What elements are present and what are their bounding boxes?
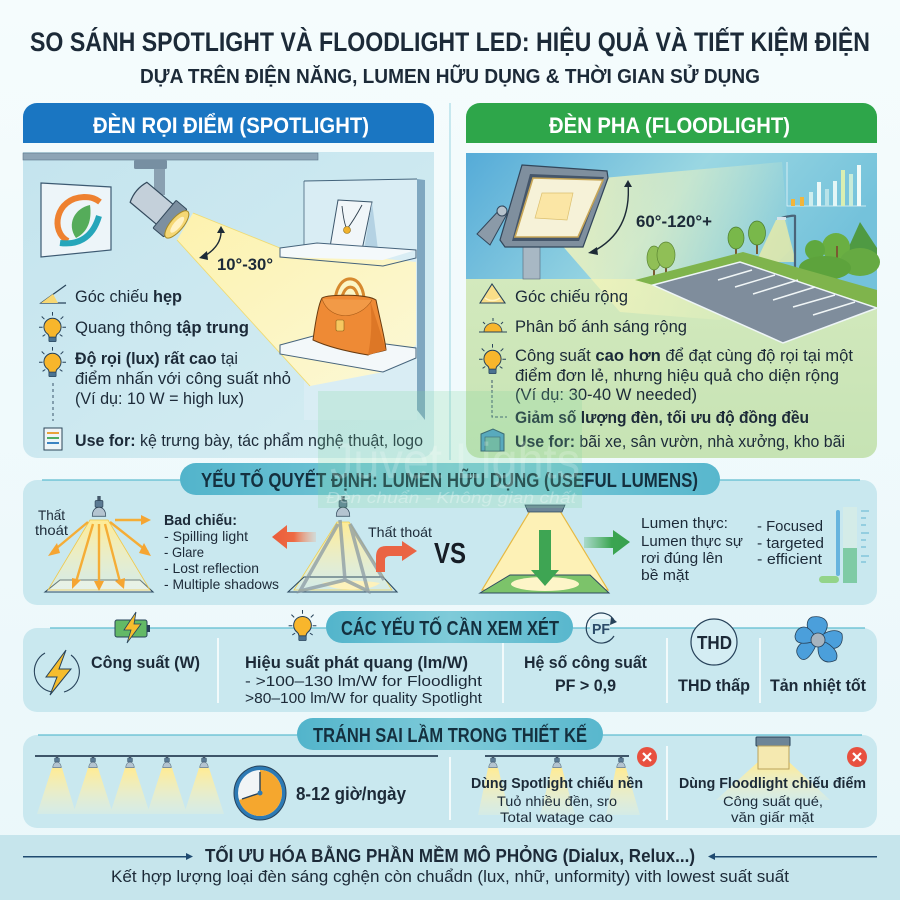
beam angle arrow [588, 180, 632, 255]
icon: bulb lux [39, 347, 66, 377]
wide angle text: Góc chiếu rộng [515, 287, 628, 306]
bad beam list [164, 512, 279, 592]
gauge [819, 507, 869, 583]
THD label: THD thấp [678, 676, 750, 695]
wall display with shelves [304, 179, 425, 420]
spotlight header: ĐÈN RỌI ĐIỂM (SPOTLIGHT) [93, 113, 369, 138]
footer band [0, 835, 900, 900]
watermark: Juvet Lights [330, 433, 580, 489]
higher power text: Công suất cao hơn để đạt cùng độ rọi tại một [515, 346, 853, 365]
lamp with shadows [288, 496, 397, 592]
power factor text: Hệ số công suất [524, 653, 647, 672]
beam angle label: 60°-120°+ [636, 212, 712, 231]
subtitle: DỰA TRÊN ĐIỆN NĂNG, LUMEN HỮU DỤNG & THỜI GIAN SỬ DỤNG [140, 64, 760, 88]
grass text panel background [466, 279, 877, 458]
power label: Công suất (W) [91, 653, 200, 672]
real lumen text: Lumen thực: [641, 515, 728, 532]
trees and bushes [647, 221, 880, 280]
icon: power lightning [34, 650, 79, 695]
higher power text: (Ví dụ: 30-40 W needed) [515, 385, 697, 404]
mistake: floodlight for accent: văn giấr mặt [731, 809, 814, 825]
bad beam list: - Glare [164, 544, 204, 560]
efficacy text: - >100–130 lm/W for Floodlight [245, 673, 483, 690]
heading pill: CÁC YẾU TỐ CẦN XEM XÉT [341, 616, 559, 640]
focused flux text: Quang thông tập trung [75, 318, 249, 337]
high lux text: (Ví dụ: 10 W = high lux) [75, 389, 244, 408]
power factor text [524, 653, 647, 695]
mistake: floodlight for accent: Dùng Floodlight chiếu điểm [679, 775, 866, 792]
arrow: right [708, 853, 877, 860]
high lux text: Độ rọi (lux) rất cao tại [75, 349, 238, 368]
panel background [23, 628, 877, 712]
power factor text: PF > 0,9 [555, 676, 616, 695]
watermark: Đèn chuẩn - Không gian chất [326, 489, 577, 507]
mistake: spotlight for ambient: Tuỏ nhiều đền, sro [497, 793, 617, 809]
efficacy text: >80–100 lm/W for quality Spotlight [245, 690, 483, 707]
heading pill [180, 463, 720, 495]
beam angle arrow [199, 226, 225, 260]
panel background [23, 480, 877, 605]
bad beam list: Bad chiếu: [164, 512, 237, 529]
cooling label: Tản nhiệt tốt [770, 676, 866, 695]
floodlight header: ĐÈN PHA (FLOODLIGHT) [549, 113, 790, 138]
icon: wide angle [480, 284, 505, 303]
higher power text [515, 346, 853, 404]
heading pill: YẾU TỐ QUYẾT ĐỊNH: LUMEN HỮU DỤNG (USEFUL LUMENS) [201, 468, 698, 492]
watermark [318, 391, 582, 508]
high lux text: điểm nhấn với công suất nhỏ [75, 369, 291, 388]
light beam [177, 213, 416, 386]
bad lamp with scattered rays [45, 496, 153, 592]
label: loss left [35, 507, 68, 538]
icon: PF [586, 613, 617, 643]
red cross icon [637, 747, 657, 767]
benefits list: - Focused [757, 518, 823, 535]
spotlight use for text: Use for: kệ trưng bày, tác phẩm nghệ thuật, logo [75, 431, 423, 450]
ceiling track [23, 153, 318, 195]
high lux text [75, 349, 291, 408]
efficacy text [245, 653, 483, 707]
icon: PF: PF [592, 621, 610, 638]
icon: document [44, 428, 62, 450]
panel: floodlight [466, 103, 880, 458]
footer heading: TỐI ƯU HÓA BẰNG PHẦN MỀM MÔ PHỎNG (Dialux, Relux...) [205, 845, 695, 866]
arrow: green right [584, 530, 630, 555]
mistake: floodlight for accent [679, 737, 867, 825]
heading pill [326, 611, 573, 643]
spotlight panel background [23, 152, 434, 458]
benefits list: - targeted [757, 535, 824, 552]
icon: bulb power [479, 344, 506, 374]
icon: fan [795, 617, 842, 662]
icon: THD: THD [697, 633, 732, 653]
hours label: 8-12 giờ/ngày [296, 784, 406, 804]
mistake: spotlight for ambient: Total watage cao [500, 809, 613, 825]
red cross icon [847, 747, 867, 767]
real lumen text: bề mặt [641, 567, 690, 584]
row of track lights [35, 755, 438, 814]
panel: design mistakes [23, 718, 877, 828]
icon: warehouse [481, 429, 504, 451]
real lumen text: Lumen thực sự [641, 533, 743, 550]
arrow: left [23, 853, 193, 860]
label: loss right: Thất thoát [368, 524, 432, 540]
narrow angle text: Góc chiếu hẹp [75, 287, 182, 306]
mistake: spotlight for ambient [471, 747, 657, 825]
floodlight fixture [477, 165, 608, 279]
icon: bulb [289, 610, 316, 641]
shelf with orange handbag [280, 279, 416, 372]
arrow: red elbow [376, 541, 417, 572]
heading pill [297, 718, 603, 750]
heading pill: TRÁNH SAI LẦM TRONG THIẾT KẾ [313, 724, 587, 747]
benefits list [757, 518, 824, 568]
lamp post [756, 216, 796, 272]
shelf with necklace [280, 200, 416, 266]
label: loss left: Thất [38, 507, 65, 523]
wide distribution text: Phân bố ánh sáng rộng [515, 317, 687, 336]
bar chart [787, 162, 866, 206]
spotlight header [23, 103, 434, 143]
icon: narrow angle [41, 285, 66, 303]
panel: useful lumens [23, 463, 877, 605]
efficacy text: Hiệu suất phát quang (lm/W) [245, 653, 468, 672]
bad beam list: - Multiple shadows [164, 576, 279, 592]
panel: spotlight [23, 103, 434, 458]
floodlight beam [540, 162, 790, 320]
framed logo [41, 183, 111, 257]
panel background [23, 735, 877, 828]
floodlight use for text: Use for: bãi xe, sân vườn, nhà xưởng, kho bãi [515, 432, 845, 451]
icon: battery [115, 612, 150, 643]
arrow: red left [272, 525, 316, 549]
mistake: floodlight for accent: Công suất qué, [723, 793, 823, 809]
icon: clock [234, 766, 286, 820]
bad beam list: - Spilling light [164, 528, 248, 544]
higher power text: điểm đơn lẻ, nhưng hiệu quả cho diện rộng [515, 366, 839, 385]
icon: bulb focus [39, 312, 66, 342]
beam angle label: 10°-30° [217, 255, 273, 274]
panel: factors to consider [23, 610, 877, 712]
real lumen text [641, 515, 743, 584]
mistake: spotlight for ambient: Dùng Spotlight chiếu nền [471, 775, 643, 792]
label: loss left: thoát [35, 522, 68, 538]
reduce fixtures text: Giảm số lượng đèn, tối ưu độ đồng đều [515, 408, 809, 427]
benefits list: - efficient [757, 551, 823, 568]
footer text: Kết hợp lượng loại đèn sáng cghện còn chuẩdn (lux, nhữ, unformity) vith lowest suất suất [111, 867, 789, 886]
sky background [466, 153, 877, 303]
good lamp with green arrow [480, 505, 609, 593]
VS label: VS [434, 538, 466, 570]
track spotlight fixture [125, 177, 193, 242]
icon: sunrise [479, 318, 507, 332]
parking lot [635, 252, 877, 343]
bad beam list: - Lost reflection [164, 560, 259, 576]
real lumen text: rơi đúng lên [641, 550, 723, 567]
icon: THD [691, 619, 737, 665]
floodlight header [466, 103, 877, 143]
